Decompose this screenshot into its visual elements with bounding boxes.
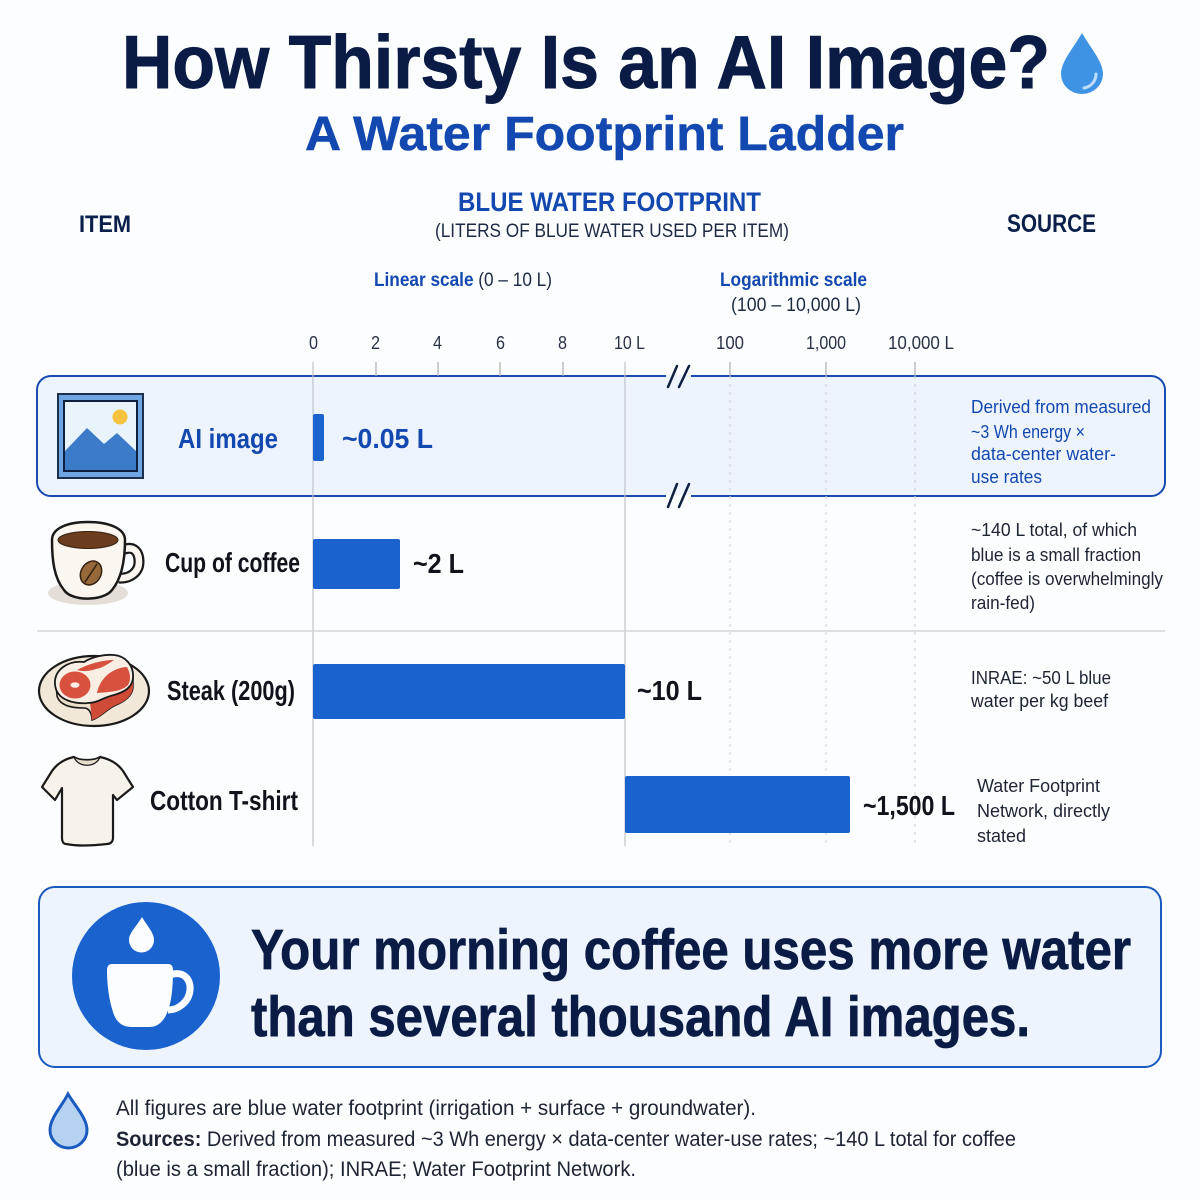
source: cotton t-shirt [977,776,1110,846]
source: cup of coffee: rain-fed) [971,593,1035,613]
source: AI image [971,397,1151,487]
logarithmic scale label [720,270,867,316]
icon: title water drop [1061,33,1103,94]
column heading: item: ITEM [79,211,131,238]
axis tick labels: 8 [558,333,567,353]
row: cotton t-shirt [42,757,1110,846]
bar: steak [313,664,625,719]
logarithmic scale label: (100 – 10,000 L) [731,295,861,316]
source: steak: INRAE: ~50 L blue [971,668,1111,688]
source: AI image: use rates [971,467,1042,487]
source: cup of coffee: (coffee is overwhelmingly [971,569,1163,589]
column heading: blue water footprint: BLUE WATER FOOTPRINT [458,187,761,217]
source: AI image: ~3 Wh energy × [971,422,1085,442]
column heading: blue water footprint [435,187,789,242]
axis tick labels [309,333,954,353]
source: cup of coffee [971,520,1163,613]
source: steak [970,668,1111,711]
source: AI image: Derived from measured [971,397,1151,417]
axis tick labels: 6 [496,333,505,353]
icon: footnote water drop [50,1094,87,1148]
source: cotton t-shirt: Network, directly [977,801,1110,821]
bar: cup of coffee [313,539,400,589]
source: AI image: data-center water- [971,444,1116,464]
value: AI image: ~0.05 L [342,423,433,454]
value: steak: ~10 L [637,675,702,706]
logarithmic scale label: Logarithmic scale [720,270,867,291]
footnote text: (blue is a small fraction); INRAE; Water Footprint Network. [116,1158,636,1181]
row: cup of coffee [48,520,1163,613]
panel: AI image row highlight [37,376,1165,496]
source: cup of coffee: ~140 L total, of which [971,520,1137,540]
axis tick labels: 0 [309,333,318,353]
axis tick labels: 10,000 L [888,333,954,353]
row divider [37,630,1165,632]
callout text [251,918,1131,1049]
source: steak: water per kg beef [970,691,1109,711]
axis tick labels: 10 L [614,333,645,353]
title: How Thirsty Is an AI Image? [122,20,1050,104]
subtitle: A Water Footprint Ladder [305,108,904,161]
footnote text: All figures are blue water footprint (irrigation + surface + groundwater). [116,1097,756,1120]
column heading: source: SOURCE [1007,210,1096,238]
icon: t-shirt [42,757,133,846]
axis tick labels: 2 [371,333,380,353]
row: AI image [58,394,1151,487]
axis grid lines [313,362,915,846]
footnote text [116,1097,1016,1181]
axis tick labels: 4 [433,333,442,353]
source: cotton t-shirt: Water Footprint [977,776,1100,796]
value: cotton t-shirt: ~1,500 L [863,790,955,821]
footnote text: Sources: Derived from measured ~3 Wh energy × data-center water-use rates; ~140 L total for coffee [116,1128,1016,1151]
source: cup of coffee: blue is a small fraction [971,545,1141,565]
icon: picture frame [58,394,143,478]
label: steak: Steak (200g) [167,675,295,706]
source: cotton t-shirt: stated [977,826,1026,846]
column heading: blue water footprint: (LITERS OF BLUE WATER USED PER ITEM) [435,221,789,242]
axis break marks [666,366,691,507]
panel: takeaway callout [39,887,1161,1067]
icon: coffee cup [48,522,139,605]
linear scale label: Linear scale (0 – 10 L) [374,270,552,291]
label: AI image: AI image [178,423,278,454]
label: cup of coffee: Cup of coffee [165,547,300,578]
icon: coffee cup with drop [72,902,220,1050]
icon: steak on plate [39,655,149,726]
bar: AI image [313,414,324,461]
label: cotton t-shirt: Cotton T-shirt [150,785,298,816]
axis tick labels: 1,000 [806,333,846,353]
callout text: than several thousand AI images. [251,985,1030,1049]
axis tick labels: 100 [716,333,744,353]
bar: cotton t-shirt [625,776,850,833]
value: cup of coffee: ~2 L [413,548,464,579]
row: steak [39,655,1111,726]
